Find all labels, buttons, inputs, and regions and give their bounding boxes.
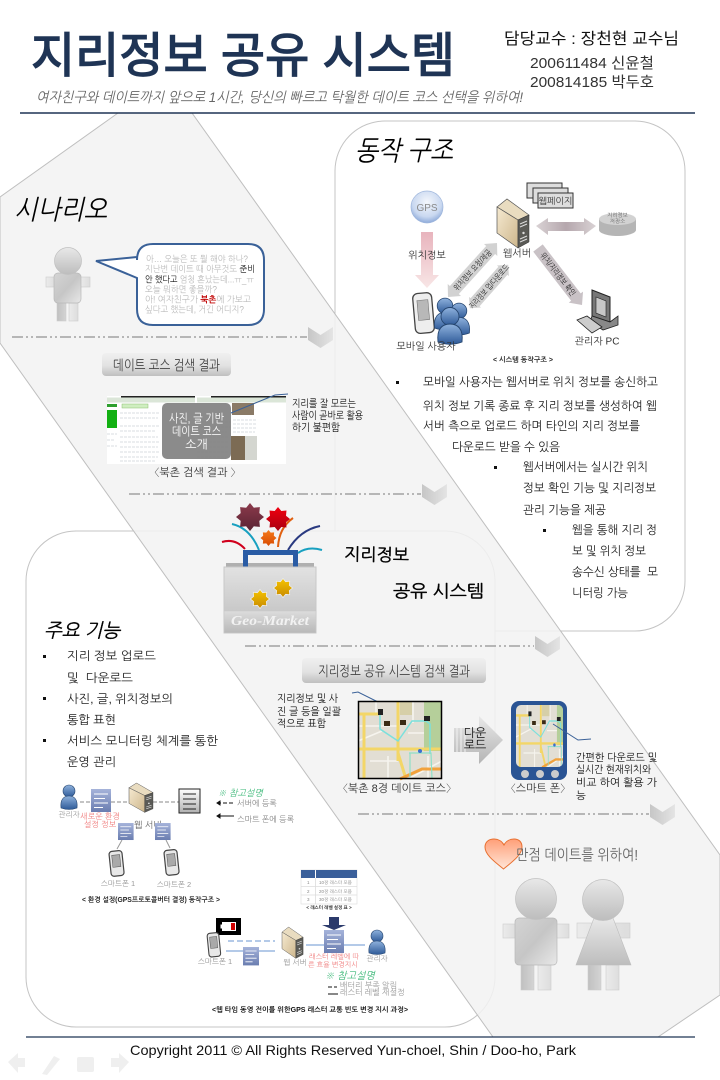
note: hard to use bbox=[292, 398, 363, 434]
callout line: phone bbox=[553, 724, 591, 740]
caption: environment setup: < 환경 설정(GPS프로토콜버터 결정) 동작구조 > bbox=[82, 896, 220, 904]
divider with chevron 3 bbox=[245, 636, 560, 657]
arrows: battery and raster flow bbox=[226, 941, 365, 951]
icon: smartphone bbox=[207, 932, 221, 957]
legend: 서버에 등록 bbox=[237, 799, 277, 808]
icon: new config document bbox=[91, 789, 111, 812]
list: main functions: 운영 관리 bbox=[67, 755, 116, 769]
text block: operation description: 보 및 위치 정보 bbox=[572, 544, 646, 558]
arrow: download bbox=[454, 716, 503, 764]
panel: main functions background bbox=[26, 531, 495, 1027]
table: raster levels: < 래스터 레벨 설정 표 > bbox=[306, 905, 352, 910]
icon: smartphone with map bbox=[511, 701, 568, 780]
button: date course search result bbox=[102, 353, 231, 376]
label: new config bbox=[80, 812, 120, 829]
table: raster levels: 3 bbox=[307, 897, 310, 902]
icon: server bbox=[129, 783, 153, 812]
icon: heart bbox=[485, 839, 522, 869]
table: raster levels: 1 bbox=[307, 880, 310, 885]
student ids: 200611484 신윤철 bbox=[530, 55, 654, 72]
note: hard to use: 사람이 곧바로 활용 bbox=[292, 410, 363, 422]
screenshot: existing search result: 데이트 코스 bbox=[172, 424, 221, 438]
table: raster levels: 30장 래스터 모음 bbox=[319, 897, 353, 902]
label: web server: 웹서버 bbox=[503, 248, 531, 260]
label: admin PC: 관리자 PC bbox=[575, 336, 619, 348]
icon: docs to phones bbox=[117, 823, 171, 849]
legend bbox=[217, 788, 295, 824]
labels: smartphones bbox=[101, 879, 191, 889]
tagline: 여자친구와 데이트까지 앞으로 1시간, 당신의 빠르고 탁월한 데이트 코스 선택을 위하여! bbox=[36, 89, 523, 105]
icon: doc on arrow bbox=[243, 947, 259, 965]
caption: smartphone: 〈스마트 폰〉 bbox=[511, 782, 565, 795]
icon: person thinking bbox=[46, 248, 90, 321]
arrow: location info request: 위치정보 요청/제공 bbox=[452, 248, 494, 293]
note: geo info: 지리정보 및 사 bbox=[277, 693, 338, 705]
note: phone bbox=[576, 752, 657, 802]
icon: admin bbox=[61, 785, 77, 810]
diagram: system operation bbox=[396, 183, 636, 364]
arrow: server to database bbox=[536, 218, 596, 235]
icon: server bbox=[282, 927, 303, 958]
heading: operation structure: 동작 구조 bbox=[355, 136, 454, 166]
speech bubble: 지난번 데이트 때 아무것도 준비 bbox=[145, 264, 255, 274]
text block: operation description: 관리 기능을 제공 bbox=[523, 503, 606, 517]
label: new config: 설정 정보 bbox=[84, 820, 117, 829]
table: raster levels: 10장 래스터 모음 bbox=[319, 880, 353, 885]
screenshot: existing search result bbox=[107, 396, 286, 464]
arrow: admin check bbox=[531, 243, 589, 310]
button: geo system search result: 지리정보 공유 시스템 검색 결과 bbox=[318, 663, 471, 679]
note: geo info: 진 글 등을 일괄 bbox=[277, 706, 341, 718]
note: phone: 실시간 현재위치와 bbox=[576, 764, 651, 776]
list: main functions: 사진, 글, 위치정보의 bbox=[67, 692, 173, 706]
note: hard to use: 지리를 잘 모르는 bbox=[292, 398, 356, 410]
label: web server: 웹 서버 bbox=[134, 820, 162, 830]
divider with chevron 2 bbox=[129, 484, 447, 505]
icon: web pages bbox=[527, 183, 573, 208]
arrow: location info: 위치정보 bbox=[408, 250, 446, 262]
speech bubble bbox=[96, 244, 264, 325]
icon: Geo-Market bag with fireworks bbox=[222, 503, 322, 633]
student ids: 200814185 박두호 bbox=[530, 74, 654, 91]
speech bubble: 오늘 뭐하면 좋을까? bbox=[145, 284, 217, 294]
slideshow navigation icons bbox=[8, 1053, 129, 1075]
text block: operation description: 니터링 가능 bbox=[572, 586, 628, 600]
icon: low battery bbox=[216, 918, 241, 935]
header title: 지리정보 공유 시스템 bbox=[31, 30, 455, 83]
handwritten label: system name: 지리정보 bbox=[344, 545, 409, 565]
arrow: geo info upload: 지리정보 업/다운로드 bbox=[467, 263, 512, 311]
text: for perfect date: 만점 데이트를 위하여! bbox=[516, 847, 638, 864]
list: main functions: 지리 정보 업로드 bbox=[67, 649, 156, 663]
icon: boy bbox=[503, 878, 569, 990]
label: raster change: 른 효율 변경지시 bbox=[308, 961, 358, 969]
divider with chevron 1 bbox=[12, 327, 333, 348]
icon: smartphones bbox=[109, 849, 179, 877]
icon: Geo-Market bag with fireworks: Geo-Market bbox=[231, 614, 310, 629]
arrow: download: 다운 bbox=[464, 726, 486, 740]
diagram: raster change bbox=[198, 870, 408, 1014]
button: geo system search result bbox=[302, 658, 486, 683]
icon: database bbox=[599, 212, 636, 236]
label: raster change bbox=[308, 953, 359, 969]
icon: admin bbox=[369, 930, 385, 954]
heading: main functions: 주요 기능 bbox=[44, 621, 122, 642]
legend: 스마트 폰에 등록 bbox=[237, 815, 295, 824]
button: date course search result: 데이트 코스 검색 결과 bbox=[113, 357, 221, 373]
handwritten label: system name: 공유 시스템 bbox=[393, 582, 484, 601]
icon: admin PC bbox=[577, 290, 618, 333]
text block: operation description bbox=[396, 375, 658, 600]
icon: girl bbox=[576, 880, 631, 990]
icon: database: 지리정보 bbox=[607, 212, 628, 219]
caption: map: 〈북촌 8경 데이트 코스〉 bbox=[343, 782, 451, 795]
copyright: Copyright 2011 © All Rights Reserved Yun-choel, Shin / Doo-ho, Park bbox=[130, 1042, 577, 1058]
text block: operation description: 정보 확인 기능 및 지리정보 bbox=[523, 481, 656, 495]
caption: existing search result: 〈북촌 검색 결과 〉 bbox=[154, 466, 236, 479]
table: raster levels bbox=[301, 870, 357, 910]
icon: GPS: GPS bbox=[416, 203, 438, 214]
legend bbox=[325, 970, 405, 997]
header rule bbox=[20, 112, 695, 114]
text block: operation description: 모바일 사용자는 웹서버로 위치 정보를 송신하고 bbox=[423, 375, 658, 389]
note: phone: 간편한 다운로드 및 bbox=[576, 752, 657, 764]
arrow: download: 로드 bbox=[464, 738, 486, 752]
list: main functions: 서비스 모니터링 체계를 통한 bbox=[67, 734, 219, 748]
arrow: geo info upload bbox=[464, 259, 514, 314]
speech bubble: 안 했다고 엄청 혼났는데...ㅠ_ㅠ bbox=[145, 274, 254, 284]
label: smartphone: 스마트폰 1 bbox=[198, 957, 232, 966]
caption: system operation: < 시스템 동작구조 > bbox=[493, 356, 553, 364]
label: admin: 관리자 bbox=[366, 954, 388, 963]
icon: mobile users bbox=[412, 292, 470, 344]
note: phone: 능 bbox=[576, 790, 586, 802]
legend: 래스터 레벨 재설정 bbox=[340, 988, 405, 997]
footer rule bbox=[26, 1036, 695, 1038]
icon: database: 저장소 bbox=[610, 218, 625, 225]
legend: 배터리 부족 알림 bbox=[340, 981, 397, 990]
divider with chevron 4 bbox=[358, 804, 675, 825]
speech bubble: 아… 오늘은 또 뭘 해야 하나? bbox=[146, 254, 248, 264]
icon: config document bbox=[179, 789, 200, 813]
note: hard to use: 하기 불편함 bbox=[292, 422, 340, 434]
heading: scenario: 시나리오 bbox=[14, 195, 108, 225]
label: mobile user: 모바일 사용자 bbox=[396, 340, 456, 352]
arrow: location info request bbox=[441, 237, 504, 303]
speech bubble: 아! 여자친구가 북촌에 가보고 bbox=[145, 294, 252, 304]
panel: system operation structure background bbox=[335, 121, 685, 631]
text block: operation description: 서버 측으로 업로드 하며 타인의 지리 정보를 bbox=[423, 419, 640, 433]
text block: operation description: 웹서버에서는 실시간 위치 bbox=[523, 460, 648, 474]
note: geo info: 적으로 표함 bbox=[277, 718, 326, 730]
text block: operation description: 위치 정보 기록 종료 후 지리 정보를 생성하여 웹 bbox=[423, 399, 657, 413]
text block: operation description: 송수신 상태를 모 bbox=[572, 565, 658, 579]
table: raster levels: 2 bbox=[307, 889, 310, 894]
label: admin: 관리자 bbox=[58, 810, 80, 819]
labels: smartphones: 스마트폰 1 bbox=[101, 879, 135, 888]
handwritten label: system name bbox=[344, 545, 484, 601]
speech bubble: 싶다고 했는데, 거긴 어디지? bbox=[145, 304, 244, 314]
callout line bbox=[231, 394, 288, 413]
note: geo info bbox=[277, 693, 341, 730]
list: main functions: 및 다운로드 bbox=[67, 671, 133, 685]
label: new config: 새로운 환경 bbox=[80, 812, 120, 821]
note: phone: 비교 하여 활용 가 bbox=[576, 777, 657, 789]
callout line: map bbox=[352, 692, 380, 703]
list: main functions bbox=[43, 649, 219, 769]
list: main functions: 통합 표현 bbox=[67, 713, 116, 727]
map: Bukchon 8 views bbox=[358, 701, 442, 779]
arrow: admin check: 위치/지리정보 확인 bbox=[538, 251, 577, 298]
screenshot: existing search result: 사진, 글 기반 bbox=[169, 412, 224, 426]
labels: smartphones: 스마트폰 2 bbox=[157, 880, 191, 889]
legend: ※ 참고설명 bbox=[325, 970, 376, 982]
icon: raster doc bbox=[324, 930, 344, 953]
icon: web pages: 웹페이지 bbox=[539, 196, 572, 206]
label: raster change: 래스터 레벨에 따 bbox=[309, 953, 359, 961]
screenshot: existing search result: 소개 bbox=[185, 438, 208, 452]
caption: raster change: <웹 타임 동영 전이를 위한GPS 래스터 교통 빈도 변경 지시 과정> bbox=[212, 1006, 408, 1014]
arrow: location info bbox=[408, 232, 446, 288]
arrows: setup flow bbox=[80, 801, 179, 803]
icon: GPS bbox=[411, 191, 443, 223]
arrow: dark down bbox=[322, 917, 346, 930]
diagram: environment setup bbox=[58, 783, 295, 904]
text block: operation description: 다운로드 받을 수 있음 bbox=[452, 440, 560, 454]
icon: web server bbox=[497, 199, 529, 248]
label: server: 웹 서버 bbox=[283, 958, 307, 967]
text block: operation description: 웹을 통해 지리 정 bbox=[572, 523, 657, 537]
student ids bbox=[530, 55, 654, 91]
legend: ※ 참고설명 bbox=[218, 788, 264, 798]
table: raster levels: 20장 래스터 모음 bbox=[319, 889, 353, 894]
professor: 담당교수 : 장천현 교수님 bbox=[504, 30, 679, 48]
